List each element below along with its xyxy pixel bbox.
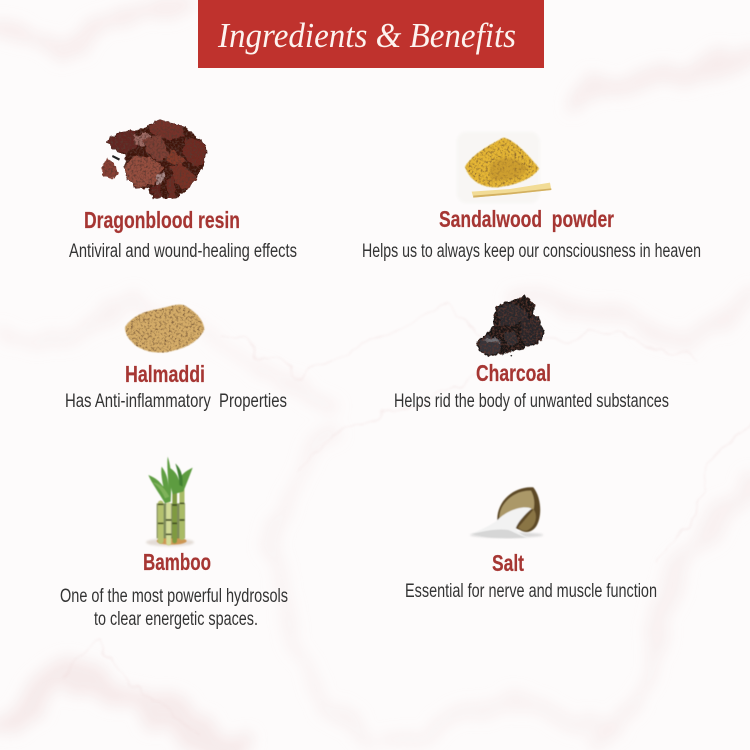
panel: halmaddi	[65, 305, 287, 412]
description: bamboo: to clear energetic spaces.	[94, 609, 258, 630]
icon: salt spilling from bowl	[470, 487, 543, 538]
icon: halmaddi powder	[125, 305, 204, 353]
description: salt: Essential for nerve and muscle function	[405, 581, 657, 602]
icon: dragonblood resin chunks	[102, 119, 207, 199]
description: bamboo	[60, 586, 288, 630]
heading: salt: Salt	[492, 550, 524, 576]
heading: bamboo: Bamboo	[143, 549, 211, 575]
title text: Ingredients & Benefits	[217, 16, 516, 55]
heading: charcoal: Charcoal	[476, 360, 551, 386]
icon: charcoal lumps	[476, 295, 544, 356]
heading: halmaddi: Halmaddi	[125, 361, 205, 387]
panel: salt	[405, 487, 657, 602]
icon: bamboo stalks	[146, 457, 194, 546]
panel: sandalwood powder	[362, 132, 701, 262]
description: halmaddi: Has Anti-inflammatory Properties	[65, 391, 287, 412]
heading: dragonblood resin: Dragonblood resin	[84, 207, 240, 233]
panel: dragonblood resin	[69, 119, 297, 262]
description: bamboo: One of the most powerful hydrosols	[60, 586, 288, 607]
panel: bamboo	[60, 457, 288, 630]
title banner	[198, 0, 544, 68]
description: dragonblood resin: Antiviral and wound-healing effects	[69, 241, 297, 262]
panel: charcoal	[394, 295, 669, 412]
icon: sandalwood powder and stick	[457, 132, 551, 203]
heading: sandalwood powder: Sandalwood powder	[439, 206, 614, 232]
description: charcoal: Helps rid the body of unwanted substances	[394, 391, 669, 412]
